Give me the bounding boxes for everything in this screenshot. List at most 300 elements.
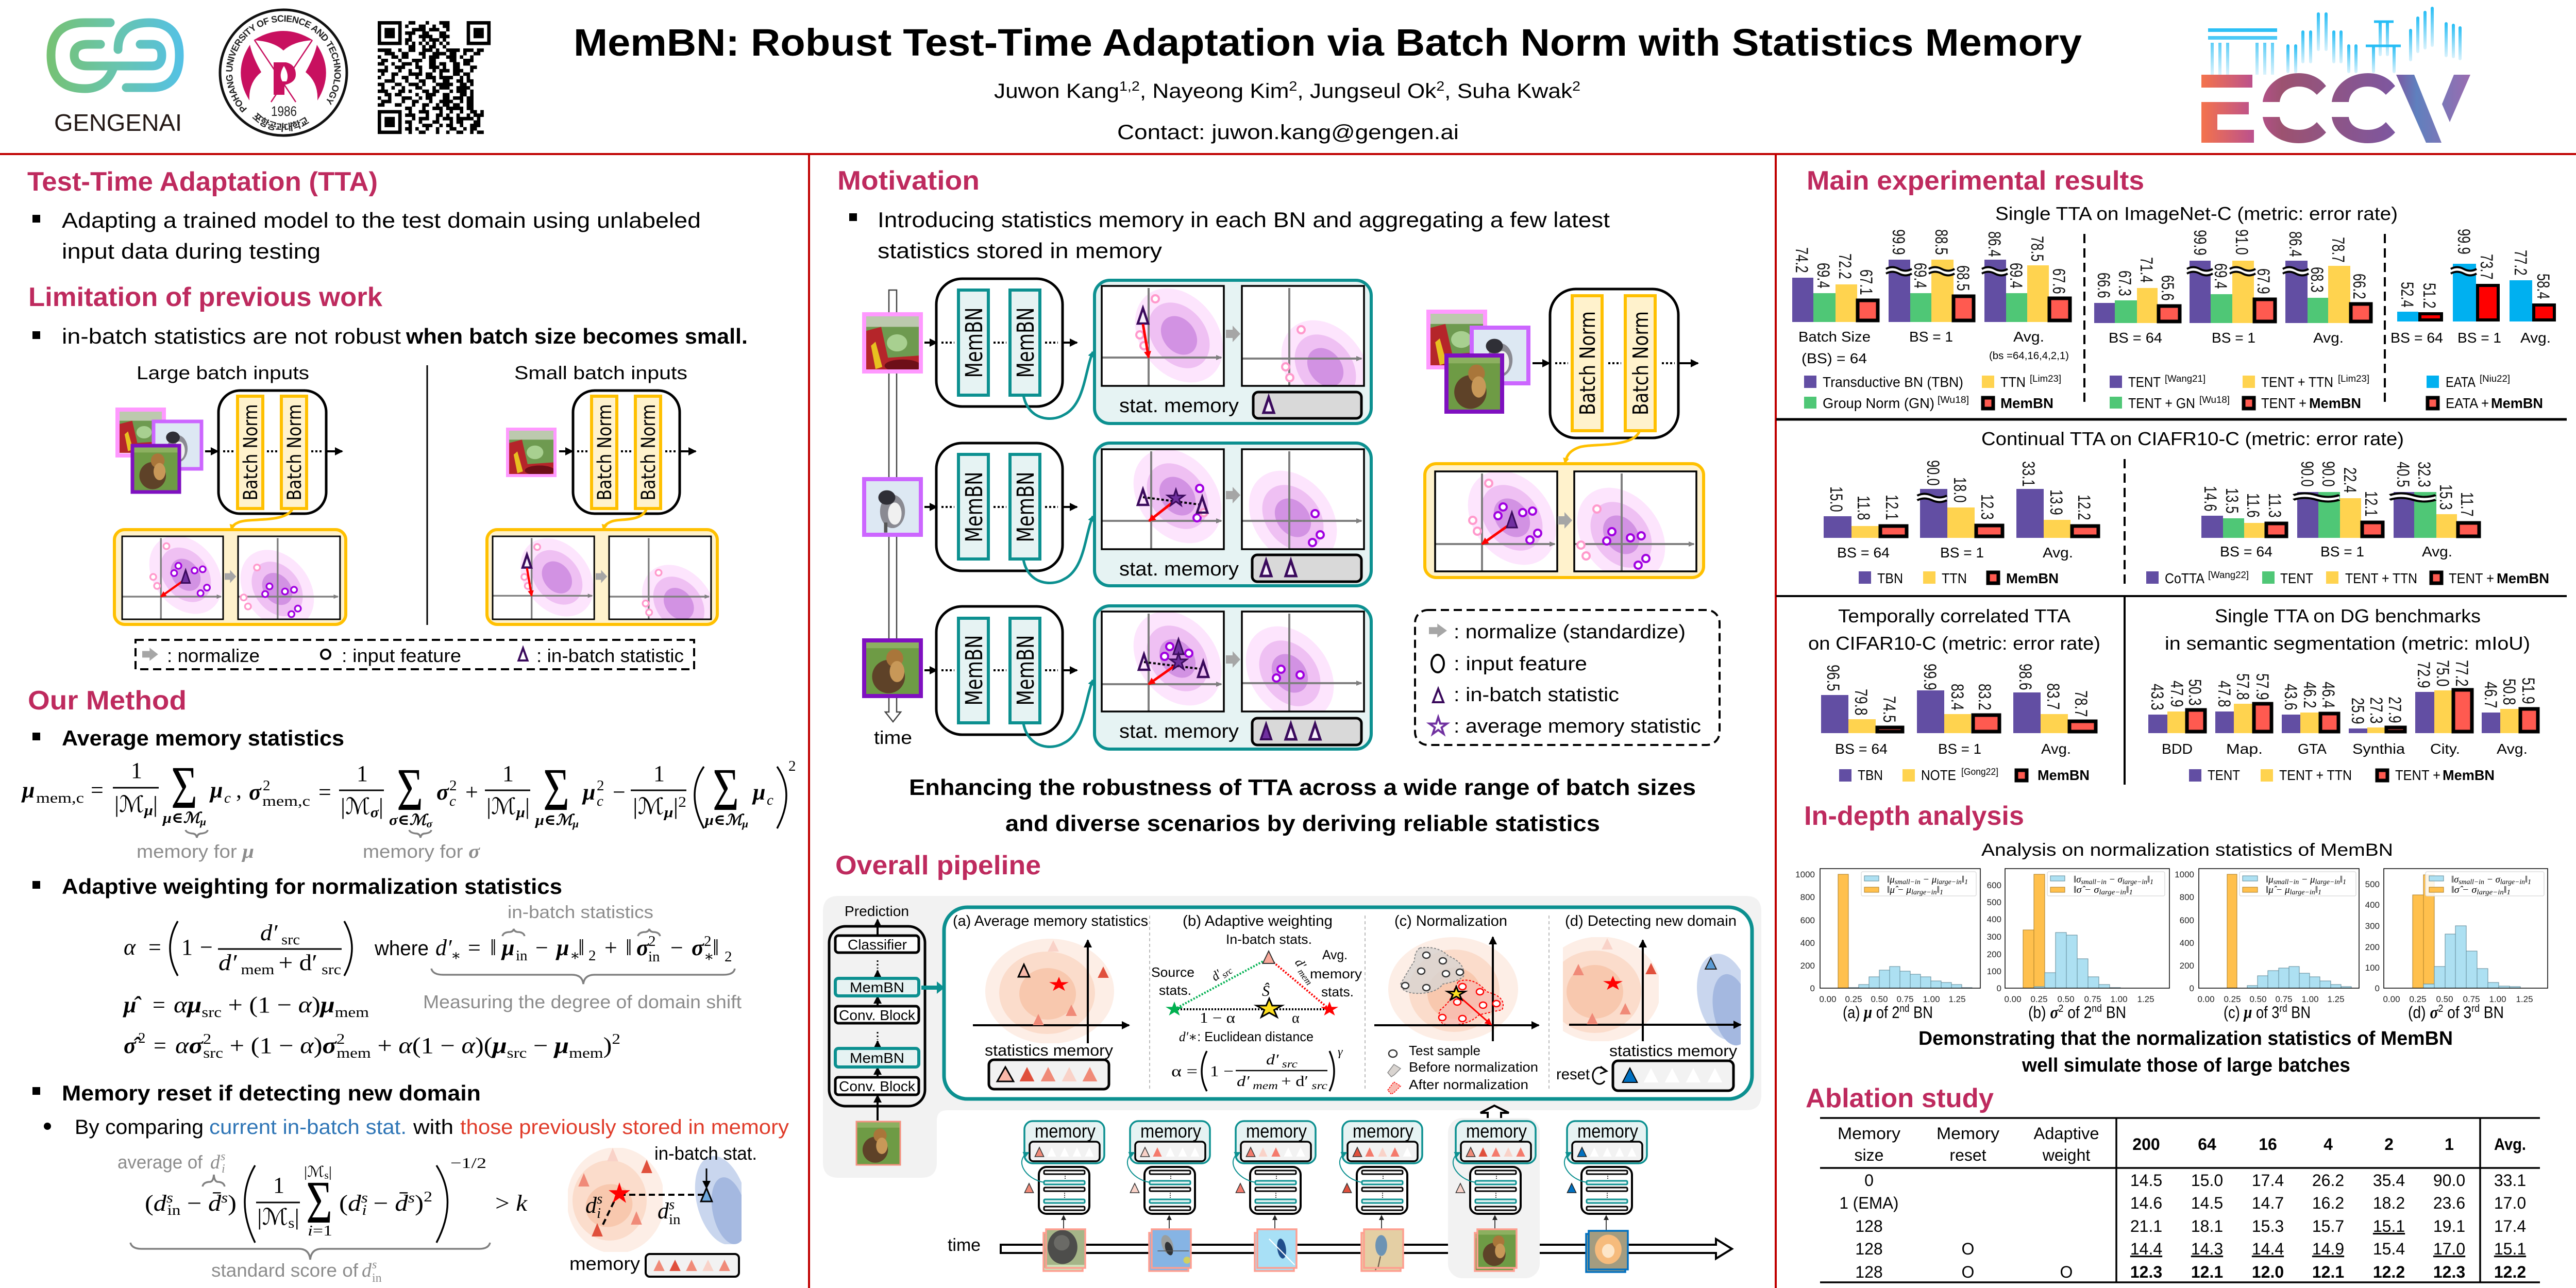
row 3: three samples: [864, 594, 1371, 749]
formula: standard score: |ℳ: [304, 1164, 323, 1180]
row 1: one sample: stat. memory: [1119, 395, 1239, 417]
histogram c: 200: [2180, 961, 2194, 971]
formula: standard score: i=1: [308, 1223, 332, 1239]
chart: DG benchmarks: 27.3: [2366, 697, 2386, 724]
formula: standard score: i: [222, 1162, 225, 1176]
histogram d: 0.75: [2463, 994, 2480, 1004]
histogram b: − σ: [2107, 874, 2123, 885]
bar chart: continual TENT/CoTTA: 32.3: [2414, 462, 2433, 487]
formula: standard score: −: [367, 1191, 395, 1216]
bar chart: EATA: EATA: [2446, 374, 2476, 390]
divider: [2384, 234, 2386, 405]
step b: adaptive weighting: + d′: [1281, 1074, 1308, 1090]
histogram c: − μ: [2299, 874, 2315, 885]
step c: normalization: After normalization: [1409, 1077, 1528, 1092]
bar chart: continual TENT/CoTTA: 15.3: [2436, 484, 2455, 510]
step d: detecting new domain: reset: [1556, 1066, 1590, 1083]
formula: adaptive weight alpha: d′: [260, 920, 277, 945]
contact: Contact: juwon.kang@gengen.ai: [1117, 121, 1459, 144]
histogram d: ‖: [2504, 885, 2507, 895]
bar chart: TBN/GN/TTN vs MemBN: [Wu18]: [1938, 395, 1969, 405]
formula: average memory statistics: Σ: [171, 754, 197, 821]
step b: adaptive weighting: stats.: [1321, 984, 1354, 999]
text block: comparison sentence: with: [413, 1116, 453, 1139]
bar chart: continual TBN/TTN: 12.2: [2074, 495, 2093, 520]
legend: large/small batch: [136, 640, 694, 669]
formula: sigma hat: ): [603, 1033, 612, 1058]
bar chart: TENT variants: 66.6: [2094, 273, 2113, 298]
table: ablation study: 23.6: [2433, 1194, 2465, 1212]
formula: standard score: (d: [339, 1191, 359, 1216]
heading: In-depth analysis: In-depth analysis: [1804, 801, 2024, 831]
bar chart: continual TBN/TTN: BS = 64: [1837, 545, 1890, 561]
diagram: new-domain detection: s: [597, 1191, 602, 1207]
formula: average memory statistics: Σ: [543, 756, 569, 823]
bar chart: TENT variants: [2094, 229, 2371, 411]
chart: DG benchmarks: GTA: [2298, 741, 2327, 757]
bar chart: TBN/GN/TTN vs MemBN: Group Norm (GN): [1823, 395, 1934, 411]
histogram b: 1: [2150, 878, 2153, 886]
histogram d: of 3: [2443, 1003, 2471, 1022]
formula: average memory statistics: 2: [678, 794, 686, 810]
formula: sigma hat: mem: [569, 1045, 603, 1061]
histogram b: BN: [2102, 1003, 2126, 1022]
histogram b: large−in: [2099, 889, 2126, 896]
histogram b: (b) σ: [2028, 1003, 2060, 1022]
formula: average memory statistics: =: [318, 779, 331, 805]
bar chart: continual TBN/TTN: TTN: [1942, 570, 1967, 586]
arrow: time axis: time: [874, 727, 912, 748]
chart: temporally correlated TTA: MemBN: [2038, 767, 2090, 783]
text block: Adaptive weighting: Adaptive weighting for normalization statistics: [62, 874, 562, 899]
authors: 1,2: [1119, 78, 1140, 94]
formula: sigma hat: mem: [336, 1045, 371, 1061]
formula: standard score: d̄: [208, 1191, 222, 1216]
chart: DG benchmarks: 77.2: [2452, 660, 2471, 687]
formula: average memory statistics: μ: [752, 779, 765, 805]
bar chart: TENT variants: [Lim23]: [2338, 374, 2369, 384]
formula: adaptive weight alpha: =: [468, 935, 481, 960]
network: architecture stack: Conv. Block: [839, 1007, 916, 1023]
formula: average memory statistics: −: [613, 779, 626, 805]
formula: average memory statistics: σ: [427, 819, 433, 830]
step b: adaptive weighting: α: [1292, 1010, 1300, 1026]
histogram b: 300: [1987, 932, 2001, 942]
formula: average memory statistics: [21, 754, 796, 830]
table: ablation study: 12.3: [2433, 1263, 2465, 1281]
histogram d: 0: [2375, 984, 2380, 993]
bar chart: TBN/GN/TTN vs MemBN: (bs =64,16,4,2,1): [1989, 350, 2069, 362]
formula: average memory statistics: c: [597, 793, 603, 809]
bar chart: EATA: 73.7: [2477, 254, 2496, 280]
formula: average memory statistics: σ: [249, 779, 262, 805]
legend: large/small batch: : input feature: [342, 645, 461, 666]
histogram b: 1: [2129, 889, 2133, 896]
chart: temporally correlated TTA: 74.5: [1879, 696, 1899, 723]
formula: adaptive weight alpha: src: [277, 931, 300, 948]
network: architecture stack: [829, 903, 945, 1165]
histogram d: 0.00: [2383, 994, 2400, 1004]
step b: adaptive weighting: α =: [1171, 1063, 1198, 1080]
chart: temporally correlated TTA: BS = 64: [1835, 741, 1888, 757]
bar chart: TENT variants: TENT: [2128, 374, 2161, 390]
text block: motivation statement: Introducing statistics memory in each BN and aggregating a few latest: [878, 208, 1610, 232]
histogram a: − μ: [1921, 874, 1937, 885]
chart: temporally correlated TTA: 83.2: [1975, 684, 1994, 710]
histogram a: 600: [1800, 916, 1815, 925]
time step 1: memory: [1035, 1121, 1096, 1142]
diagram: new-domain detection: i: [597, 1205, 601, 1222]
table: ablation study: 12.2: [2494, 1263, 2526, 1281]
bar chart: continual TENT/CoTTA: Avg.: [2422, 544, 2452, 560]
bar chart: TENT variants: BS = 64: [2109, 330, 2162, 346]
formula: average memory statistics: σ: [436, 779, 449, 805]
chart: temporally correlated TTA: 99.9: [1920, 664, 1940, 690]
formula: mu hat: [123, 992, 369, 1021]
bar chart: continual TBN/TTN: [1824, 460, 2098, 586]
histogram c: 0.00: [2197, 994, 2215, 1004]
text block: Memory reset: Memory reset if detecting new domain: [62, 1081, 481, 1105]
table: ablation study: 17.4: [2252, 1171, 2284, 1190]
step b: adaptive weighting: 1 −: [1210, 1063, 1234, 1080]
formula: average memory statistics: μ∈ℳ: [163, 810, 198, 826]
histogram b: 0.25: [2030, 994, 2048, 1004]
histogram d: [2365, 869, 2548, 1022]
formula: sigma hat: −: [527, 1033, 554, 1058]
diagram: small batch inputs: Small batch inputs: [514, 362, 687, 383]
step b: adaptive weighting: mem: [1250, 1079, 1281, 1092]
chart title: analysis: Analysis on normalization statistics of MemBN: [1981, 840, 2393, 860]
formula: standard score: s: [288, 1215, 294, 1231]
text block: limitation statement: [32, 324, 748, 348]
chart: DG benchmarks: 57.9: [2252, 673, 2272, 700]
diagram: batch norm reference: Batch Norm: [1628, 311, 1653, 415]
histogram a: 0.50: [1871, 994, 1888, 1004]
step d: detecting new domain: [1557, 915, 1742, 1092]
step b: adaptive weighting: 1 − α: [1200, 1010, 1235, 1026]
bar chart: EATA: 77.2: [2511, 250, 2530, 276]
formula: adaptive weight alpha: Measuring the degree of domain shift: [423, 991, 742, 1012]
histogram a: [1795, 869, 1980, 1022]
chart title: Single TTA ImageNet-C: Single TTA on ImageNet-C (metric: error rate): [1995, 203, 2398, 224]
bar chart: EATA: [Niu22]: [2480, 374, 2510, 384]
bar chart: TBN/GN/TTN vs MemBN: (BS) = 64: [1801, 350, 1867, 366]
chart: DG benchmarks: 47.9: [2167, 681, 2186, 707]
table: ablation study: Avg.: [2494, 1135, 2526, 1154]
bar chart: continual TENT/CoTTA: BS = 1: [2320, 544, 2364, 560]
formula: adaptive weight alpha: ∗: [451, 947, 461, 964]
formula: sigma hat: 2: [336, 1031, 345, 1047]
diagram: small batch inputs: [487, 362, 731, 657]
histogram a: 800: [1800, 892, 1815, 902]
formula: average memory statistics: 1: [357, 761, 368, 786]
histogram c: large−in: [2290, 889, 2315, 896]
formula: adaptive weight alpha: mem: [237, 961, 279, 978]
formula: adaptive weight alpha: −: [535, 935, 548, 960]
step b: adaptive weighting: src: [1278, 1058, 1298, 1070]
formula: mu hat: =: [153, 992, 165, 1018]
table: ablation study: size: [1855, 1146, 1883, 1164]
heading: Our Method: Our Method: [28, 686, 187, 716]
formula: average memory statistics: μ: [582, 779, 595, 805]
diagram: new-domain detection: d: [585, 1193, 597, 1218]
bar chart: EATA: 52.4: [2397, 282, 2416, 308]
chart: temporally correlated TTA: Avg.: [2041, 741, 2071, 757]
histogram b: 0.00: [2004, 994, 2022, 1004]
histogram b: 0: [1997, 984, 2001, 993]
logo: ECCV: [2201, 7, 2470, 143]
histogram c: ‖: [2315, 885, 2318, 895]
histogram a: ‖μ: [1887, 874, 1895, 885]
formula: average memory statistics: mem,c: [262, 793, 310, 809]
formula: sigma hat: src: [507, 1045, 527, 1061]
formula: average memory statistics: mem,c: [36, 790, 84, 806]
bar chart: TBN/GN/TTN vs MemBN: [Lim23]: [2030, 374, 2061, 384]
formula: standard score: Σ: [306, 1168, 332, 1236]
chart: DG benchmarks: 43.6: [2281, 684, 2300, 710]
heading: Motivation: Motivation: [837, 166, 980, 196]
formula: sigma hat: σ̂: [124, 1033, 142, 1058]
formula: standard score: i: [362, 1202, 367, 1218]
histogram c: 1: [2318, 889, 2321, 896]
formula: adaptive weight alpha: 2: [704, 933, 711, 950]
legend: motivation: : input feature: [1454, 653, 1587, 675]
histogram d: 100: [2365, 963, 2380, 973]
formula: average memory statistics: c: [767, 792, 773, 808]
formula: standard score: d: [362, 1260, 372, 1281]
chart: temporally correlated TTA: [1808, 605, 2100, 783]
bar chart: EATA: BS = 1: [2457, 330, 2501, 346]
bar chart: TENT variants: 78.7: [2328, 237, 2347, 263]
bar chart: EATA: 99.9: [2454, 229, 2473, 255]
formula: adaptive weight alpha: μ: [555, 935, 569, 960]
formula: sigma hat: α)σ: [300, 1033, 334, 1058]
step c: normalization: Before normalization: [1409, 1059, 1538, 1075]
histogram b: 400: [1987, 914, 2001, 924]
panel: right column: [1776, 166, 2567, 1282]
bar chart: continual TENT/CoTTA: 13.5: [2222, 488, 2241, 514]
formula: adaptive weight alpha: σ: [692, 935, 704, 960]
chart: DG benchmarks: 72.9: [2414, 662, 2433, 688]
formula: sigma hat: 2: [612, 1031, 620, 1047]
formula: average memory statistics: μ: [21, 777, 35, 803]
row 2: two samples: MemBN: [961, 472, 988, 542]
formula: sigma hat: ασ: [175, 1033, 201, 1058]
table: ablation study: 21.1: [2130, 1217, 2162, 1235]
formula: average memory statistics: σ: [371, 804, 379, 821]
table: ablation study: 90.0: [2433, 1171, 2465, 1190]
formula: adaptive weight alpha: in: [516, 947, 528, 964]
network: architecture stack: Classifier: [848, 937, 907, 953]
formula: sigma hat: =: [154, 1033, 166, 1058]
histogram a: 1: [1940, 889, 1943, 896]
histogram b: ‖: [2126, 885, 2129, 895]
annotation: memory for mu and sigma: [137, 830, 481, 862]
bar chart: TENT variants: 65.6: [2158, 275, 2177, 301]
histogram a: ‖: [1962, 874, 1964, 885]
table: ablation study: 12.3: [2130, 1263, 2162, 1281]
bar chart: TBN/GN/TTN vs MemBN: 72.2: [1835, 253, 1854, 279]
diagram: small batch inputs: Batch Norm: [594, 404, 616, 501]
histogram b: 0.50: [2057, 994, 2075, 1004]
step d: detecting new domain: (d) Detecting new domain: [1565, 913, 1737, 929]
text block: comparison sentence: [44, 1116, 789, 1139]
diagram: new-domain detection: [567, 1143, 757, 1277]
formula: standard score: d: [210, 1151, 221, 1173]
chart: DG benchmarks: 75.0: [2433, 660, 2452, 687]
histogram d: ‖: [2525, 874, 2528, 885]
chart: temporally correlated TTA: 96.5: [1823, 665, 1843, 691]
heading: Main experimental results: Main experimental results: [1807, 166, 2144, 196]
formula: standard score: ): [228, 1191, 237, 1216]
histogram a: nd: [1899, 1003, 1909, 1014]
row 3: three samples: MemBN: [1012, 635, 1039, 706]
table: ablation study: O: [1962, 1240, 1974, 1258]
logo: GENGENAI: GENGENAI: [54, 109, 182, 136]
formula: average memory statistics: |ℳ: [486, 794, 515, 819]
bar chart: TENT variants: 67.9: [2253, 268, 2272, 294]
histogram b: nd: [2092, 1003, 2102, 1014]
step b: adaptive weighting: Ŝ: [1262, 982, 1270, 999]
time step 2: [1127, 1121, 1210, 1271]
formula: standard score: s: [221, 1190, 228, 1206]
formula: average memory statistics: μ: [663, 804, 674, 821]
formula: average memory statistics: 2: [597, 777, 604, 794]
bar chart: continual TENT/CoTTA: 90.0: [2318, 461, 2337, 487]
table: ablation study: 12.1: [2312, 1263, 2344, 1281]
formula: adaptive weight alpha: ‖: [578, 935, 584, 960]
formula: adaptive weight alpha: σ: [636, 935, 649, 960]
bar chart: continual TENT/CoTTA: 11.6: [2243, 493, 2262, 518]
chart: DG benchmarks: TENT +: [2395, 767, 2440, 783]
annotation: memory for mu and sigma: memory for σ: [363, 841, 481, 862]
table: ablation study: 33.1: [2494, 1171, 2526, 1190]
bar chart: TBN/GN/TTN vs MemBN: 99.9: [1889, 229, 1908, 255]
arrow: time line: time: [948, 1235, 981, 1255]
text block: motivation statement: statistics stored in memory: [878, 239, 1162, 263]
arrow: time line: [948, 1235, 1732, 1259]
step c: normalization: (c) Normalization: [1394, 913, 1507, 929]
formula: mu hat: + (1 −: [222, 992, 298, 1018]
bar chart: TENT variants: 91.0: [2232, 229, 2251, 255]
bar chart: TENT variants: 68.3: [2307, 267, 2326, 293]
formula: standard score: ): [415, 1191, 424, 1216]
histogram d: 400: [2365, 900, 2380, 910]
table: ablation study: 14.5: [2130, 1171, 2162, 1190]
chart: DG benchmarks: 51.9: [2518, 677, 2538, 704]
bar chart: EATA: EATA +: [2446, 395, 2489, 411]
histogram d: small−in: [2459, 878, 2484, 886]
bar chart: continual TBN/TTN: 18.0: [1950, 477, 1969, 503]
formula: adaptive weight alpha: +: [604, 935, 617, 960]
authors: , Suha Kwak: [1444, 80, 1573, 103]
bar chart: continual TENT/CoTTA: 14.6: [2200, 486, 2219, 512]
network: architecture stack: Conv. Block: [839, 1078, 916, 1094]
formula: standard score: standard score of: [211, 1260, 359, 1281]
table: ablation study: 200: [2132, 1135, 2160, 1154]
histogram b: large−in: [2123, 878, 2147, 886]
histogram c: (c) μ of 3: [2224, 1003, 2284, 1022]
formula: average memory statistics: μ∈ℳ: [705, 812, 740, 828]
chart: DG benchmarks: BDD: [2162, 741, 2193, 757]
section divider: [1776, 596, 2567, 785]
histogram a: ‖μ̂ − μ: [1887, 885, 1911, 895]
step b: adaptive weighting: memory: [1310, 966, 1362, 981]
table: ablation study: 14.5: [2191, 1194, 2223, 1212]
histogram c: 1.00: [2301, 994, 2319, 1004]
histogram a: 1.25: [1948, 994, 1966, 1004]
chart: temporally correlated TTA: on CIFAR10-C (metric: error rate): [1808, 633, 2100, 654]
histogram d: large−in: [2477, 889, 2504, 896]
table: ablation study: 19.1: [2433, 1217, 2465, 1235]
table: ablation study: Memory: [1838, 1124, 1900, 1143]
table: ablation study: 4: [2324, 1135, 2333, 1154]
formula: average memory statistics: c: [224, 790, 231, 806]
network: architecture stack: MemBN: [850, 979, 904, 995]
table: ablation study: reset: [1949, 1146, 1986, 1164]
text block: key takeaway: and diverse scenarios by deriving reliable statistics: [1005, 811, 1600, 836]
step b: adaptive weighting: d′: [1292, 956, 1309, 972]
row 2: two samples: stat. memory: [1119, 558, 1239, 580]
formula: standard score: in: [372, 1272, 382, 1285]
diagram: small batch inputs: Batch Norm: [637, 404, 660, 501]
row 3: three samples: MemBN: [961, 635, 988, 706]
histogram c: 0.75: [2275, 994, 2293, 1004]
table: ablation study: 14.4: [2130, 1240, 2162, 1258]
formula: adaptive weight alpha: ‖: [626, 935, 632, 960]
formula: adaptive weight alpha: + d′: [279, 950, 317, 975]
step b: adaptive weighting: d′: [1237, 1074, 1247, 1090]
formula: average memory statistics: μ: [209, 777, 223, 803]
step b: adaptive weighting: src: [1308, 1079, 1328, 1092]
chart: temporally correlated TTA: 79.8: [1851, 689, 1871, 716]
diagram: new-domain detection: s: [669, 1196, 675, 1213]
step b: adaptive weighting: In-batch stats.: [1226, 931, 1312, 947]
chart: DG benchmarks: City.: [2430, 741, 2460, 757]
text block: key takeaway: [909, 775, 1696, 836]
histogram c: 0.25: [2224, 994, 2241, 1004]
bar chart: TBN/GN/TTN vs MemBN: [1792, 229, 2070, 411]
formula: adaptive weight alpha: d′: [435, 935, 452, 960]
formula: adaptive weight alpha: −: [670, 935, 683, 960]
formula: average memory statistics: |ℳ: [114, 792, 143, 817]
histogram b: 500: [1987, 897, 2001, 907]
bar chart: continual TENT/CoTTA: MemBN: [2497, 570, 2549, 586]
histogram d: 1.00: [2489, 994, 2506, 1004]
histogram c: [2175, 869, 2359, 1022]
time step 5: memory: [1466, 1121, 1527, 1142]
authors: 2: [1289, 78, 1297, 94]
histogram b: ‖σ̂ − σ: [2074, 885, 2097, 895]
formula: standard score: average of: [117, 1151, 203, 1173]
formula: average memory statistics: +: [465, 779, 478, 805]
chart: DG benchmarks: 46.7: [2481, 682, 2500, 708]
text block: analysis takeaway: well simulate those of large batches: [2022, 1055, 2350, 1076]
authors: Juwon Kang: [994, 80, 1107, 103]
chart: DG benchmarks: 57.8: [2233, 673, 2252, 700]
text block: comparison sentence: those previously stored in memory: [460, 1116, 789, 1139]
histogram b: of 2: [2063, 1003, 2092, 1022]
text block: TTA definition: [32, 208, 701, 263]
formula: standard score: > k: [495, 1191, 528, 1216]
bar chart: EATA: MemBN: [2491, 395, 2543, 411]
logo: POSTECH seal: 1986: [271, 104, 297, 119]
logo: POSTECH seal: POHANG UNIVERSITY OF SCIENCE AND TECHNOLOGY: [226, 15, 341, 113]
histogram d: 1.25: [2516, 994, 2533, 1004]
histogram a: large−in: [1911, 889, 1937, 896]
chart: DG benchmarks: 50.8: [2499, 679, 2519, 705]
bar chart: continual TENT/CoTTA: [2146, 461, 2549, 586]
